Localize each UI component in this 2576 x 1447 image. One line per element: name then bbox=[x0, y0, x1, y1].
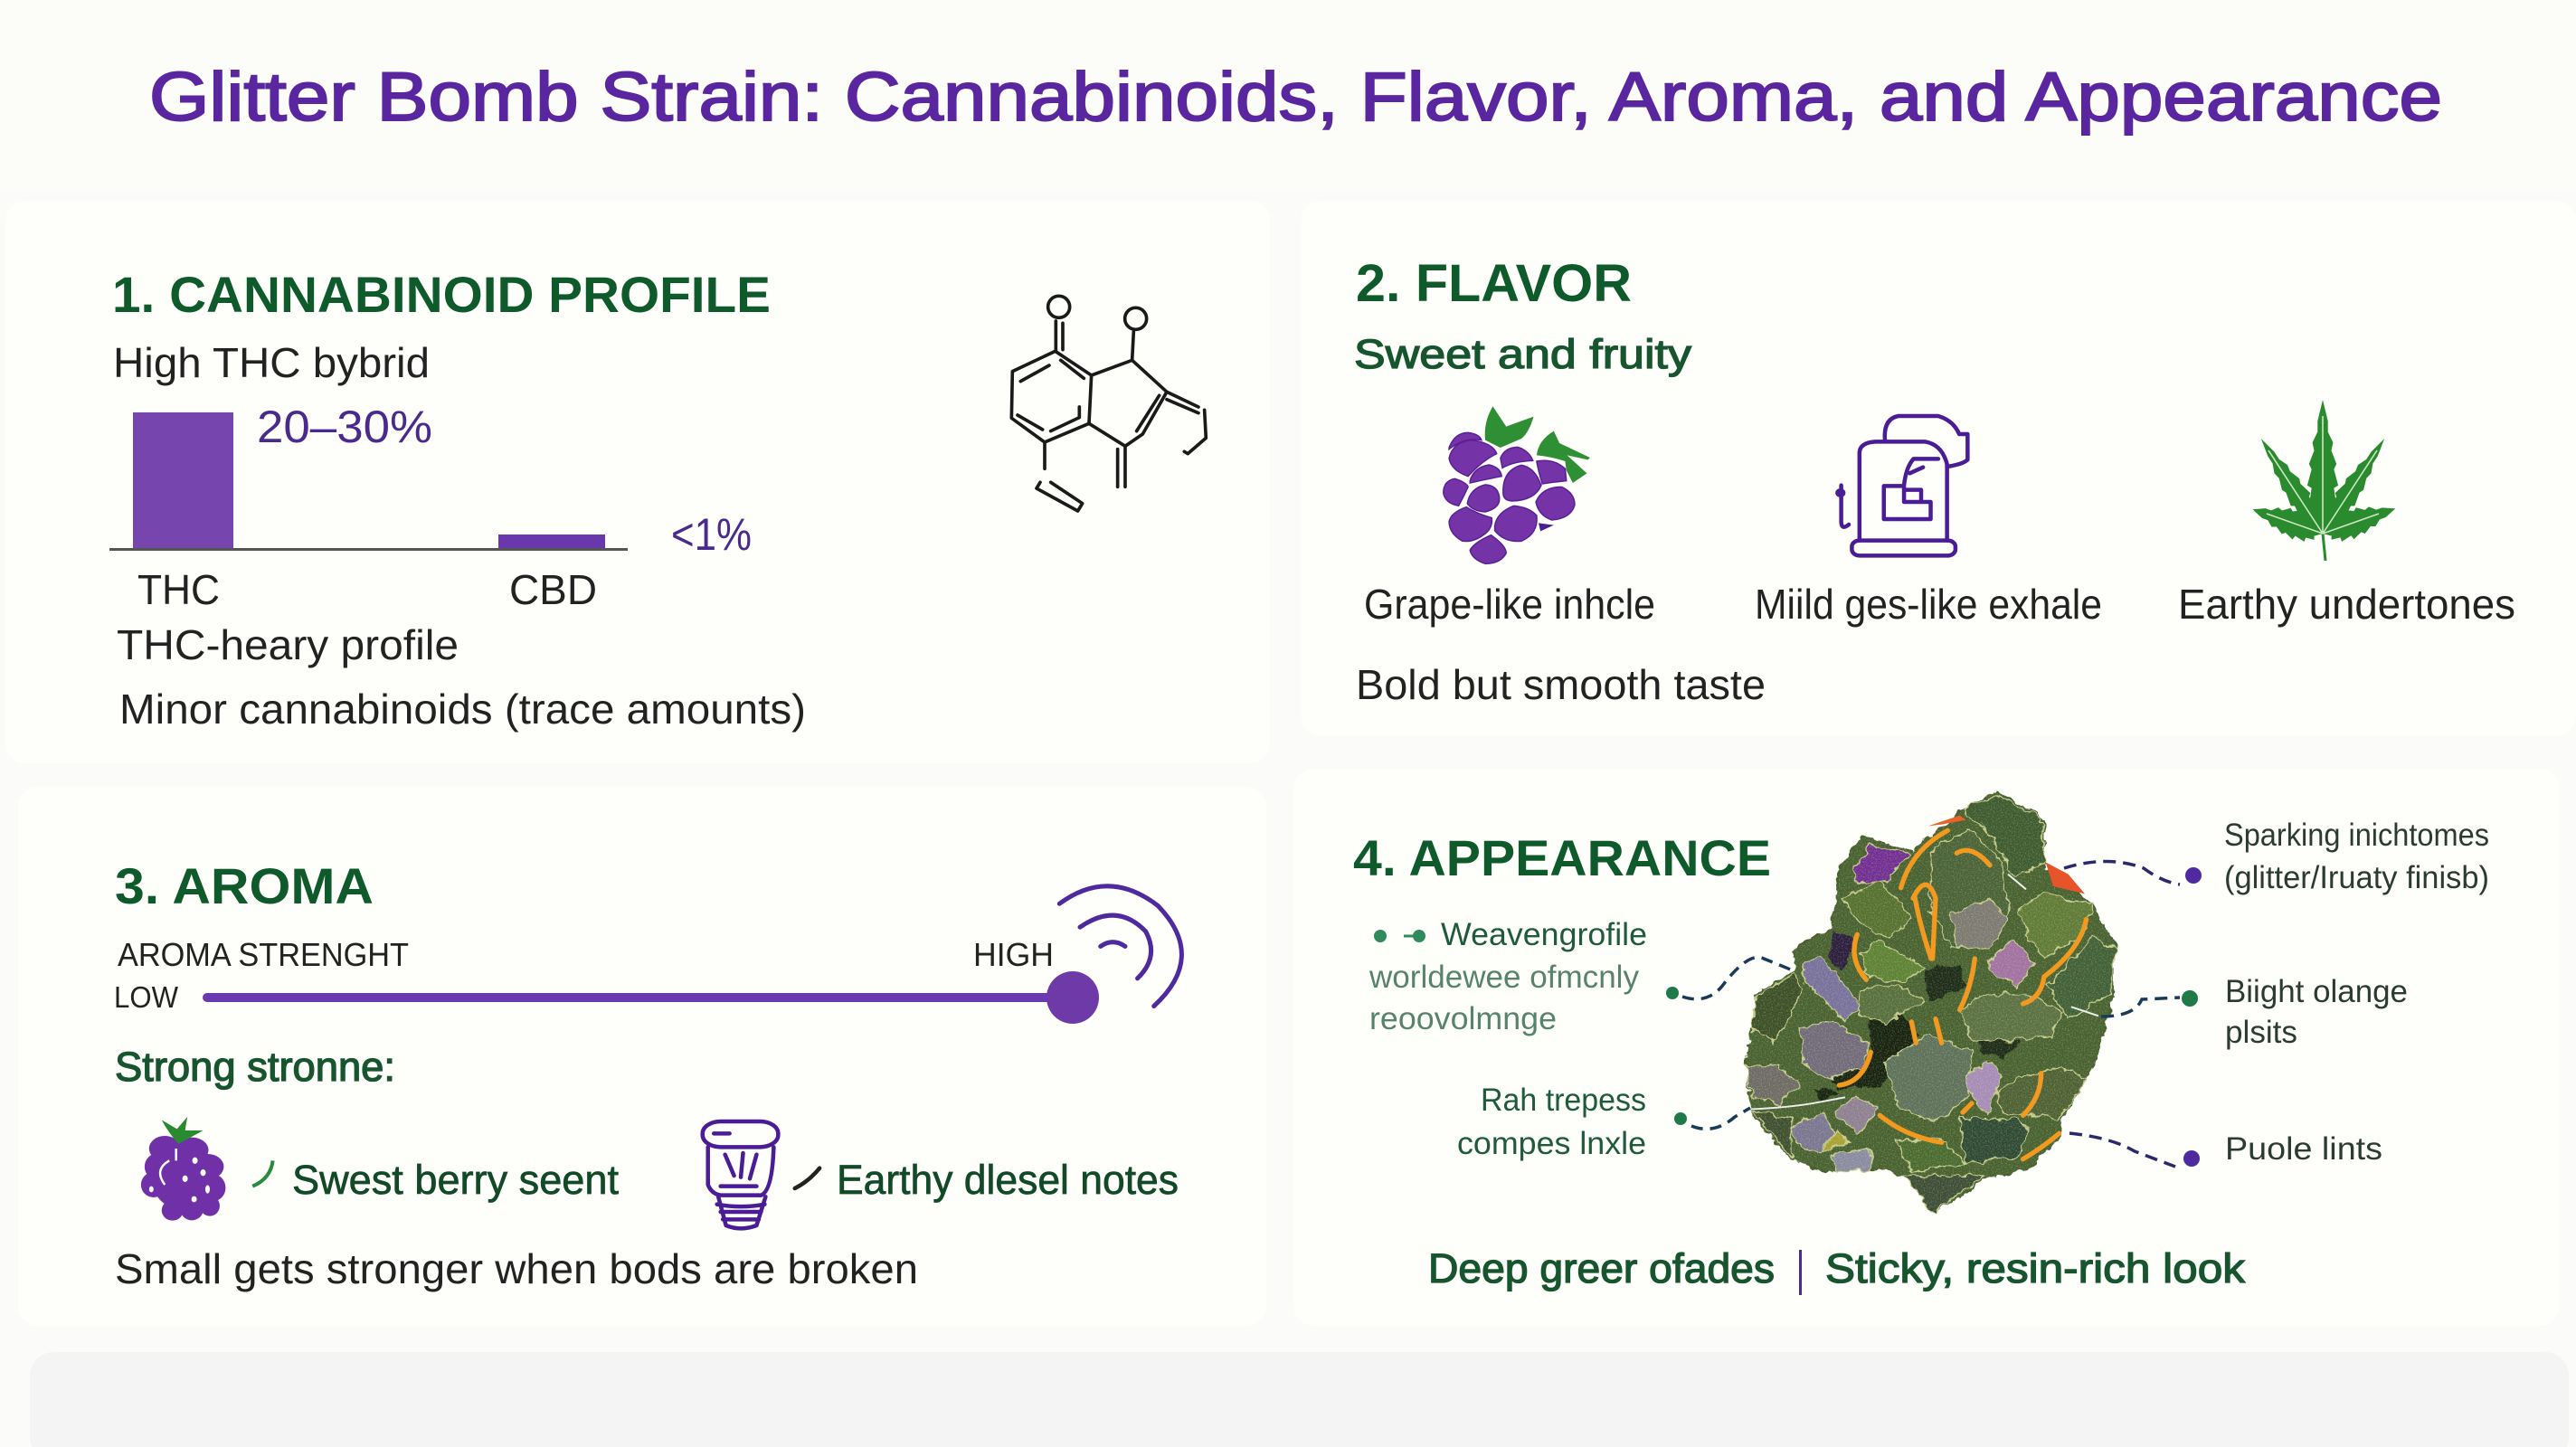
callout: left top label: worldewee ofmcnly bbox=[1368, 960, 1639, 995]
label: low: LOW bbox=[114, 980, 179, 1014]
panel: flavor bbox=[1301, 201, 2576, 735]
axis label: THC: THC bbox=[137, 566, 220, 613]
callout: orange pistils label bbox=[2225, 974, 2408, 1050]
connector: orange pistils bbox=[2101, 990, 2198, 1017]
image: cannabis bud bbox=[1743, 790, 2118, 1214]
text: high THC hybrid: High THC bybrid bbox=[113, 339, 430, 386]
value: CBD percent: <1% bbox=[671, 509, 752, 560]
heading: appearance: 4. APPEARANCE bbox=[1353, 829, 1771, 886]
callout: left bottom label bbox=[1457, 1083, 1646, 1161]
label: mild gas-like exhale: Miild ges-like exhale bbox=[1755, 581, 2102, 628]
text: bold but smooth taste: Bold but smooth taste bbox=[1356, 661, 1766, 708]
callout: trichomes label: (glitter/Iruaty finisb) bbox=[2224, 860, 2489, 895]
text: smell note: Small gets stronger when bods are broken bbox=[115, 1245, 918, 1292]
callout: trichomes label: Sparking inichtomes bbox=[2224, 818, 2489, 853]
label: aroma strength: AROMA STRENGHT bbox=[118, 936, 409, 973]
label: earthy diesel notes: Earthy dlesel notes bbox=[837, 1157, 1179, 1203]
icon: scent waves bbox=[1059, 886, 1181, 1007]
callout: purple hints label: Puole lints bbox=[2225, 1131, 2382, 1167]
aroma strength gauge bbox=[114, 886, 1181, 1024]
caption: sticky resin-rich look: Sticky, resin-rich look bbox=[1825, 1245, 2246, 1291]
callout: trichomes label bbox=[2224, 818, 2489, 895]
caption: deep green shades: Deep greer ofades bbox=[1428, 1245, 1775, 1291]
connector: left bottom bbox=[1674, 1108, 1750, 1129]
icon: diesel lamp bbox=[703, 1121, 819, 1228]
heading: cannabinoid profile: 1. CANNABINOID PROFILE bbox=[112, 266, 771, 323]
callout: left bottom label: compes lnxle bbox=[1457, 1126, 1646, 1161]
callout: left top label: reoovolmnge bbox=[1369, 1001, 1557, 1036]
heading: flavor: 2. FLAVOR bbox=[1356, 254, 1632, 313]
icon: fuel pump bbox=[1837, 416, 1967, 555]
axis label: CBD: CBD bbox=[509, 566, 597, 613]
label: high: HIGH bbox=[973, 936, 1054, 973]
panel: appearance bbox=[1353, 790, 2488, 1295]
callout: orange pistils label: plsits bbox=[2225, 1015, 2297, 1050]
subheading: sweet and fruity: Sweet and fruity bbox=[1354, 331, 1692, 377]
callout: left top label: Weavengrofile bbox=[1441, 917, 1647, 952]
label: sweet berry scent: Swest berry seent bbox=[292, 1157, 619, 1203]
bar chart: THC and CBD bbox=[109, 402, 752, 613]
value: THC percent: 20–30% bbox=[257, 402, 432, 452]
callout: left top label bbox=[1368, 917, 1647, 1036]
icon: cannabis leaf bbox=[2248, 400, 2401, 561]
text: THC-heavy profile: THC-heary profile bbox=[117, 621, 459, 668]
panel: aroma bbox=[18, 787, 1266, 1326]
callout: orange pistils label: Biight olange bbox=[2225, 974, 2408, 1009]
icon: grapes bbox=[1444, 406, 1590, 563]
text: minor cannabinoids: Minor cannabinoids (trace amounts) bbox=[119, 686, 806, 733]
panel: cannabinoid profile bbox=[5, 201, 1270, 763]
icon: berry bbox=[141, 1117, 273, 1221]
subheading: strong aroma: Strong stronne: bbox=[115, 1044, 395, 1090]
connector: left top bbox=[1666, 957, 1793, 999]
connector: purple hints bbox=[2069, 1133, 2200, 1167]
label: earthy undertones: Earthy undertones bbox=[2178, 581, 2515, 628]
label: grape-like inhale: Grape-like inhcle bbox=[1364, 581, 1655, 628]
connector: trichomes bbox=[2064, 861, 2202, 884]
callout: left bottom label: Rah trepess bbox=[1481, 1083, 1646, 1118]
icon: molecule bbox=[1011, 296, 1206, 511]
title: Glitter Bomb Strain: Cannabinoids, Flavor, Aroma, and Appearance bbox=[149, 59, 2442, 136]
footer strip bbox=[30, 1352, 2569, 1447]
heading: aroma: 3. AROMA bbox=[115, 857, 374, 914]
